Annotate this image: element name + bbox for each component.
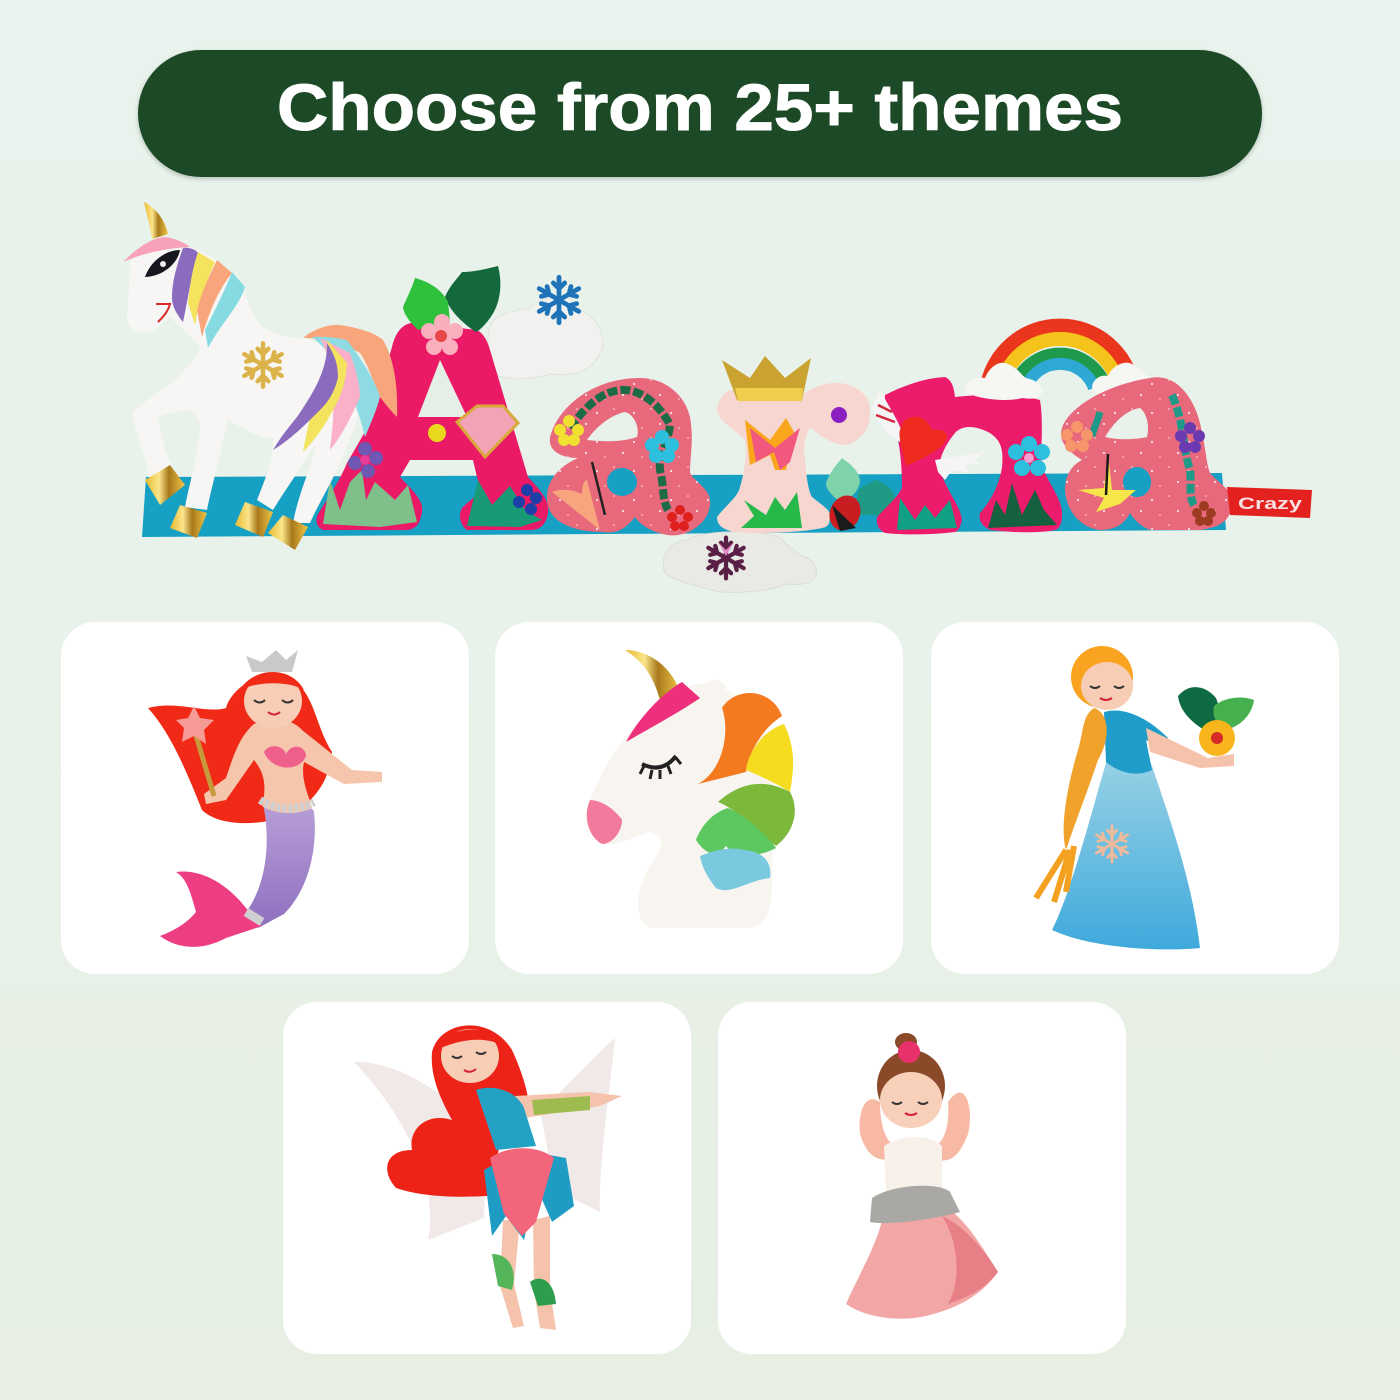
legs [500,1220,524,1328]
mane [698,693,782,784]
crown [246,650,298,672]
glitter belt [870,1186,960,1223]
bikini [264,746,306,768]
face and hair [1071,646,1133,708]
face [244,674,302,728]
wings [354,1062,486,1240]
skirt [846,1210,998,1319]
letter n [872,363,1172,534]
blue felt base strip [142,473,1226,537]
horn [144,202,168,239]
red tag [1227,487,1312,518]
gold snowflake [242,343,284,387]
card: fairy [283,1002,691,1354]
card: blue dress princess [931,622,1339,974]
card: unicorn head [495,622,903,974]
gold hooves [145,465,185,505]
letter r (pale pink) [717,356,895,536]
dress [1052,754,1200,949]
clouds on rainbow [965,363,1042,400]
eye [145,250,180,277]
bottom cloud with snowflake [663,532,816,592]
pink nose [587,800,622,844]
wings and heart [872,390,902,442]
forelock and mane [123,237,190,262]
braid [1064,708,1107,850]
bun and hair [895,1033,917,1051]
red mouth [156,304,170,322]
bouquet [1178,687,1219,730]
ear [702,680,726,706]
red tag: Crazy [1238,494,1303,513]
petal skirt [484,1150,574,1240]
red hair [148,675,332,823]
top [476,1088,536,1150]
bodice [884,1137,942,1192]
leaves and flower on A [445,266,500,332]
horn [625,650,680,700]
bodice and sleeves [1104,710,1168,774]
ladybird and leaves [826,458,860,502]
title banner [138,50,1262,177]
body [127,244,358,523]
letter A [316,266,548,530]
face [880,1072,942,1128]
tail [246,800,315,928]
card: ballerina [718,1002,1126,1354]
letter a (glitter pink) [547,378,710,535]
red hair [387,1025,530,1197]
eye [642,756,676,768]
felt name banner: Aarna [123,202,1312,592]
bow [626,682,700,742]
head [586,684,774,928]
arms [860,1099,900,1160]
arms [1146,728,1234,768]
body and arms [204,719,382,813]
unicorn [123,202,397,550]
gem [457,406,518,457]
wand [192,722,214,796]
title banner: Choose from 25+ themes [277,70,1123,144]
final letter a [1061,377,1232,530]
crown [722,356,811,400]
arm [515,1092,622,1118]
rainbow [987,326,1133,388]
card: mermaid [61,622,469,974]
grass [323,470,417,527]
top cloud with blue snowflake [488,277,603,379]
face [441,1029,499,1083]
tail [303,325,397,417]
